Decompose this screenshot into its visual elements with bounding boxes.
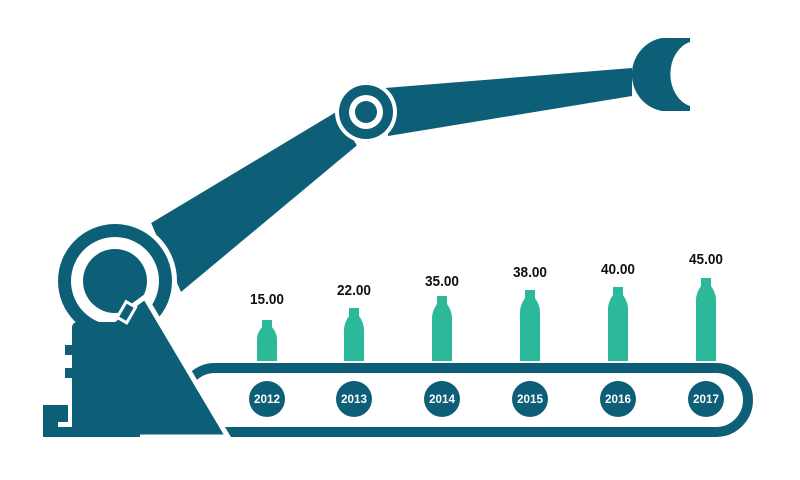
- robot base: [43, 297, 228, 437]
- value labels: 45.00: [689, 251, 723, 268]
- lower arm: [148, 108, 360, 296]
- year circles: 2013: [341, 392, 367, 406]
- value labels: 15.00: [250, 291, 284, 308]
- bottles: [257, 278, 716, 361]
- robot arm: [53, 38, 690, 343]
- bottle 2012: [257, 320, 277, 361]
- value labels: 22.00: [337, 282, 371, 299]
- value labels: 40.00: [601, 261, 635, 278]
- year circles: 2016: [605, 392, 631, 406]
- upper arm: [385, 68, 632, 136]
- year circles: 2012: [254, 392, 280, 406]
- year circles: 2014: [429, 392, 455, 406]
- year circles: 2015: [517, 392, 543, 406]
- bottle 2017: [696, 278, 716, 361]
- bottle 2014: [432, 296, 452, 361]
- year circles: [249, 381, 724, 417]
- value labels: 38.00: [513, 264, 547, 281]
- bottle 2016: [608, 287, 628, 361]
- bottle 2013: [344, 308, 364, 361]
- year circles: 2017: [693, 392, 719, 406]
- value labels: 35.00: [425, 273, 459, 290]
- gripper: [632, 38, 690, 111]
- conveyor belt: [183, 368, 748, 432]
- bottle 2015: [520, 290, 540, 361]
- elbow joint: [335, 81, 397, 143]
- base ring: [53, 219, 177, 343]
- value labels: [250, 251, 723, 308]
